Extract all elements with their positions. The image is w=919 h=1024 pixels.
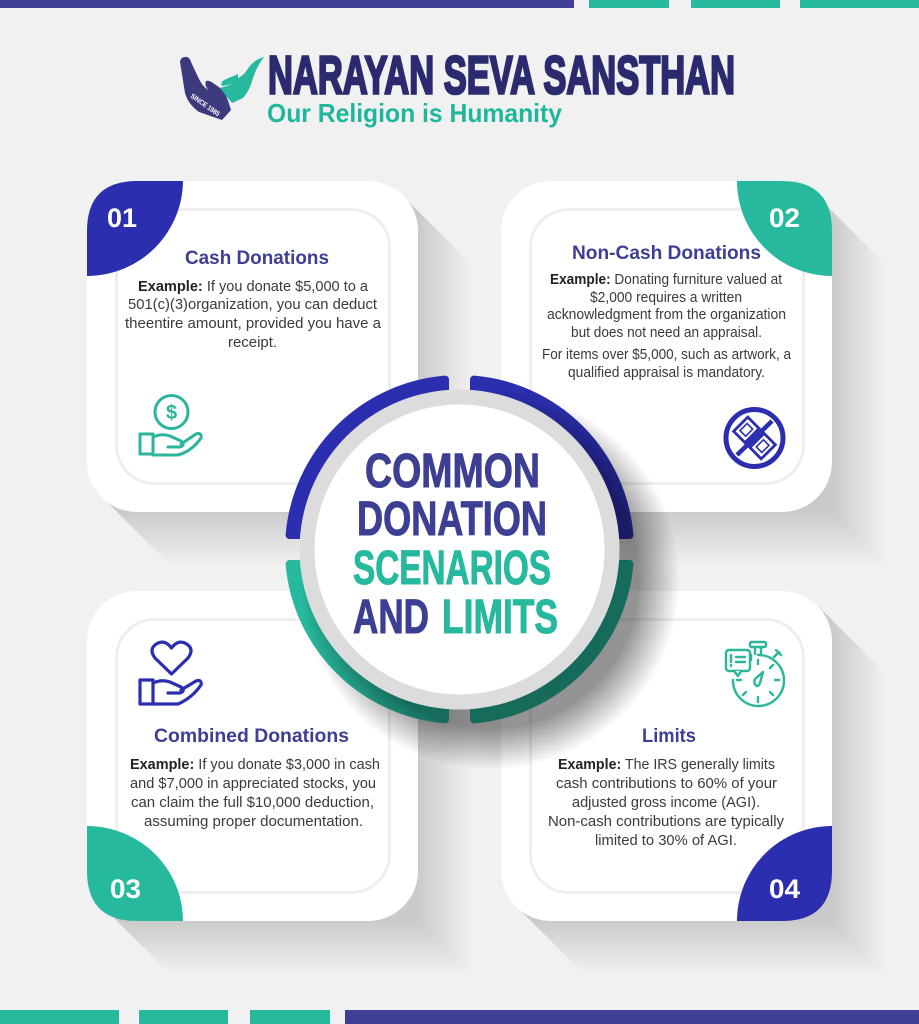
text: limits example: Non-cash contributions are typically (548, 814, 785, 830)
text: non-cash example: $2,000 requires a written (590, 290, 742, 306)
text: limits example: limited to 30% of AGI. (595, 833, 737, 849)
grey ring (300, 390, 620, 710)
bottom decorative bars (0, 1010, 919, 1024)
top decorative bars (0, 0, 919, 8)
text: limits example: cash contributions to 60% of your (556, 776, 777, 792)
panel: combined donations (87, 591, 418, 921)
text: limits example: Example: The IRS generally limits (558, 757, 775, 773)
arc: top right blue (474, 380, 629, 535)
icon: hand with coin: $ (166, 402, 177, 424)
number 02: 02 (769, 203, 800, 233)
text: combined example (130, 757, 380, 830)
heading: limits: Limits (642, 725, 696, 747)
text: non-cash example: acknowledgment from the organization (547, 307, 786, 323)
white disc (314, 404, 604, 694)
text: cash example (125, 279, 382, 351)
badge 04 (737, 826, 832, 921)
title (353, 445, 558, 644)
title: SCENARIOS (353, 542, 551, 595)
text: cash example: 501(c)(3)organization, you can deduct (128, 297, 377, 313)
title: COMMON (365, 445, 540, 498)
title: AND (353, 591, 429, 644)
since 1985 text: SINCE 1985 (189, 93, 221, 118)
badge 02 (737, 181, 832, 276)
panel: non-cash donations (501, 181, 832, 512)
text: non-cash example: but does not need an appraisal. (571, 325, 762, 341)
number 04: 04 (769, 874, 800, 904)
arc: top left blue (290, 380, 445, 535)
icon: hand with coin (140, 396, 201, 455)
circle shadow (300, 390, 680, 770)
text: cash example: theentire amount, provided you have a (125, 316, 382, 332)
heading: cash donations: Cash Donations (185, 247, 329, 269)
icon: stopwatch with speech bubble (726, 642, 784, 706)
text: cash example: Example: If you donate $5,000 to a (138, 279, 369, 295)
panel: cash donations (87, 181, 418, 512)
text: limits example: adjusted gross income (AGI). (572, 795, 760, 811)
logo: Narayan Seva Sansthan (180, 46, 735, 128)
text: combined example: Example: If you donate $3,000 in cash (130, 757, 380, 773)
icon: teal hand (220, 57, 264, 103)
number 03: 03 (110, 874, 141, 904)
arc: bottom right teal (474, 564, 629, 719)
text: limits example (548, 757, 785, 849)
card shadows (102, 196, 886, 975)
icon: dark hand (180, 57, 231, 120)
text: non-cash example: qualified appraisal is mandatory. (568, 365, 765, 381)
icon: no money (726, 410, 783, 466)
icon: hand with heart (140, 642, 201, 704)
panel: limits (501, 591, 832, 921)
number 01: 01 (107, 203, 137, 233)
text: combined example: and $7,000 in appreciated stocks, you (130, 776, 376, 792)
heading: combined donations: Combined Donations (154, 725, 349, 747)
badge 03 (87, 826, 183, 921)
logo tagline: Our Religion is Humanity (267, 98, 563, 128)
arc: bottom left teal (290, 564, 445, 719)
text: combined example: can claim the full $10,000 deduction, (131, 795, 374, 811)
heading: non-cash donations: Non-Cash Donations (572, 242, 761, 264)
text: non-cash example: For items over $5,000, such as artwork, a (542, 347, 792, 363)
title: LIMITS (442, 591, 558, 644)
text: cash example: receipt. (228, 335, 277, 351)
text: non-cash example: Example: Donating furniture valued at (550, 272, 782, 288)
central badge (290, 380, 680, 770)
title: DONATION (357, 493, 547, 546)
text: combined example: assuming proper documentation. (144, 814, 363, 830)
badge 01 (87, 181, 183, 276)
text: non-cash example (542, 272, 792, 381)
